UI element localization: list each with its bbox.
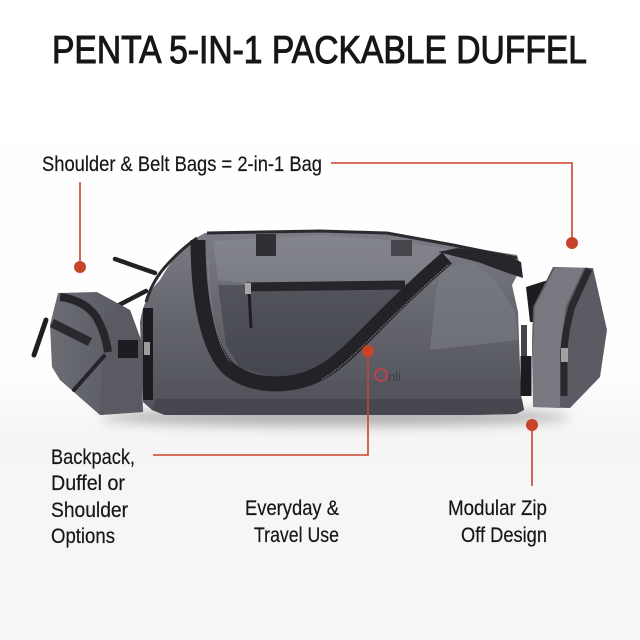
lower front darker area bbox=[158, 380, 520, 399]
zip pull bbox=[245, 283, 251, 294]
callout: everyday and travel use: Everyday & bbox=[245, 497, 339, 520]
upper front panel bbox=[213, 235, 455, 283]
left bag dark zip bands bbox=[60, 297, 108, 352]
product photo: modular duffel bag bbox=[34, 231, 607, 415]
callout: modular zip off design: Off Design bbox=[461, 524, 547, 547]
silver zipper pulls bbox=[144, 342, 150, 355]
bag shadow bbox=[100, 408, 570, 426]
shoulder strap bbox=[198, 240, 447, 384]
lower pocket bbox=[218, 285, 405, 378]
callout: backpack duffel shoulder: Duffel or bbox=[51, 472, 125, 495]
top rim binding bbox=[146, 231, 517, 302]
buckle straps behind bag bbox=[115, 259, 155, 305]
callout: shoulder and belt bags bbox=[42, 152, 578, 273]
side zips bbox=[143, 308, 153, 400]
callout: shoulder and belt bags: Shoulder & Belt Bags = 2-in-1 Bag bbox=[42, 152, 322, 176]
right belt bag bbox=[532, 267, 607, 408]
callout: everyday and travel use: Travel Use bbox=[254, 524, 339, 547]
right bag dark zip band bbox=[564, 269, 589, 396]
brand logo: nli bbox=[388, 369, 401, 384]
callout: backpack duffel shoulder: Options bbox=[51, 525, 115, 548]
callout: backpack duffel shoulder: Shoulder bbox=[51, 499, 128, 522]
right bag zip pull bbox=[561, 348, 568, 362]
upper right highlight bbox=[430, 262, 518, 350]
callout: everyday and travel use bbox=[245, 497, 339, 547]
pocket zip bbox=[246, 285, 405, 287]
strap buckle and top trim bbox=[438, 248, 523, 278]
top handle tabs bbox=[256, 234, 276, 256]
left bag side face bbox=[100, 310, 143, 415]
duffel main body bbox=[140, 231, 524, 415]
left belt bag bbox=[50, 292, 143, 415]
brand logo bbox=[375, 369, 401, 384]
callout: modular zip off design: Modular Zip bbox=[448, 497, 547, 520]
callout: backpack duffel shoulder: Backpack, bbox=[51, 446, 135, 469]
right bag strap bbox=[526, 280, 548, 322]
base band bbox=[152, 399, 524, 415]
callout: backpack duffel shoulder bbox=[51, 345, 374, 548]
callout: modular zip off design bbox=[448, 419, 547, 547]
strap stitching bbox=[208, 260, 449, 379]
right bag light face bbox=[533, 268, 584, 408]
